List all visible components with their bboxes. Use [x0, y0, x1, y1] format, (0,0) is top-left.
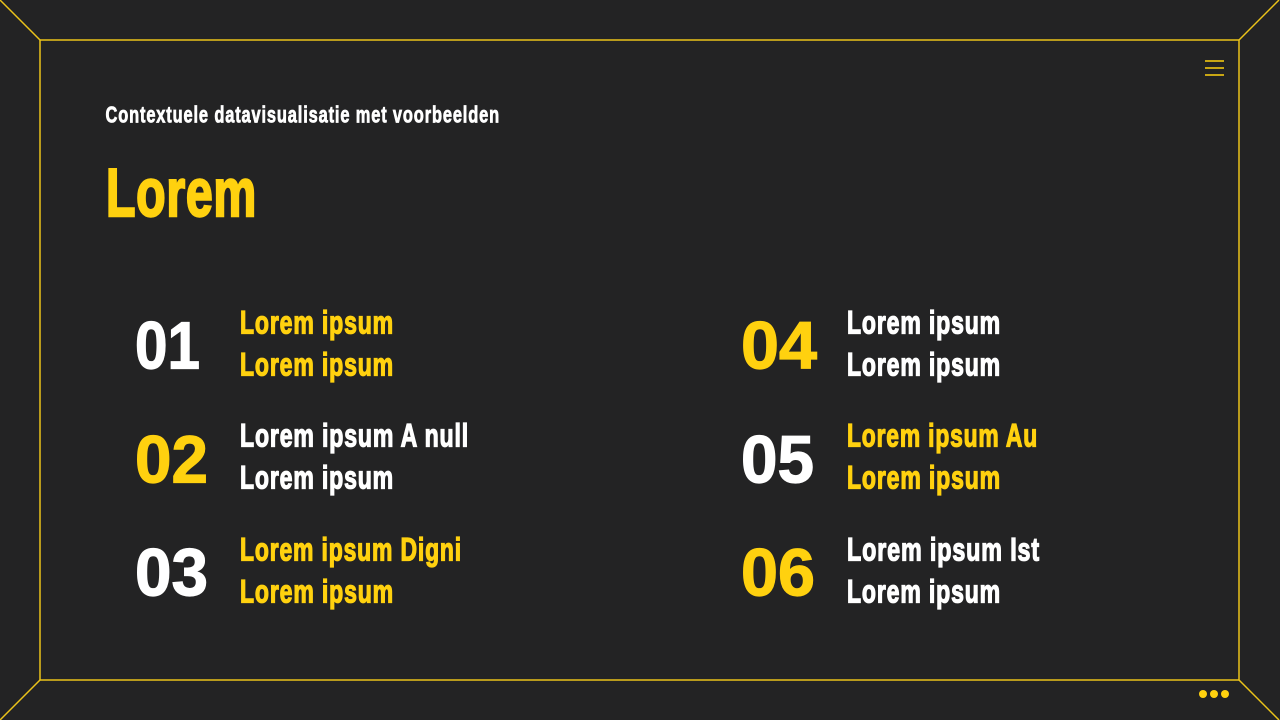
number 06: 06: [741, 536, 815, 610]
label 05: [847, 418, 1038, 496]
label 02: Lorem ipsum: [240, 460, 394, 496]
label 06: Lorem ipsum: [847, 574, 1001, 610]
label 01: Lorem ipsum: [240, 346, 394, 382]
number 02: 02: [135, 422, 208, 498]
label 01: Lorem ipsum: [240, 304, 394, 340]
list item 01: [135, 304, 394, 384]
label 01: [240, 304, 394, 382]
label 06: [847, 532, 1040, 610]
icon: menu: [1205, 61, 1224, 75]
number 04: 04: [741, 308, 817, 384]
number 05: 05: [741, 422, 814, 498]
label 05: Lorem ipsum: [847, 460, 1001, 496]
label 03: [240, 532, 462, 610]
number 03: 03: [135, 536, 208, 610]
label 04: [847, 304, 1001, 382]
label 03: Lorem ipsum Digni: [240, 532, 462, 568]
label 02: Lorem ipsum A null: [240, 418, 469, 454]
list item 05: [741, 418, 1038, 498]
label 02: [240, 418, 469, 496]
label 04: Lorem ipsum: [847, 346, 1001, 382]
title: Lorem: [106, 155, 257, 231]
list item 06: [741, 532, 1040, 610]
label 04: Lorem ipsum: [847, 304, 1001, 340]
number 01: 01: [135, 308, 200, 384]
list item 03: [135, 532, 462, 610]
list item 02: [135, 418, 469, 498]
label 03: Lorem ipsum: [240, 574, 394, 610]
label 06: Lorem ipsum Ist: [847, 532, 1040, 568]
list item 04: [741, 304, 1001, 384]
icon: three dots: [1199, 690, 1229, 698]
label 05: Lorem ipsum Au: [847, 418, 1038, 454]
subtitle: Contextuele datavisualisatie met voorbeelden: [106, 102, 500, 128]
